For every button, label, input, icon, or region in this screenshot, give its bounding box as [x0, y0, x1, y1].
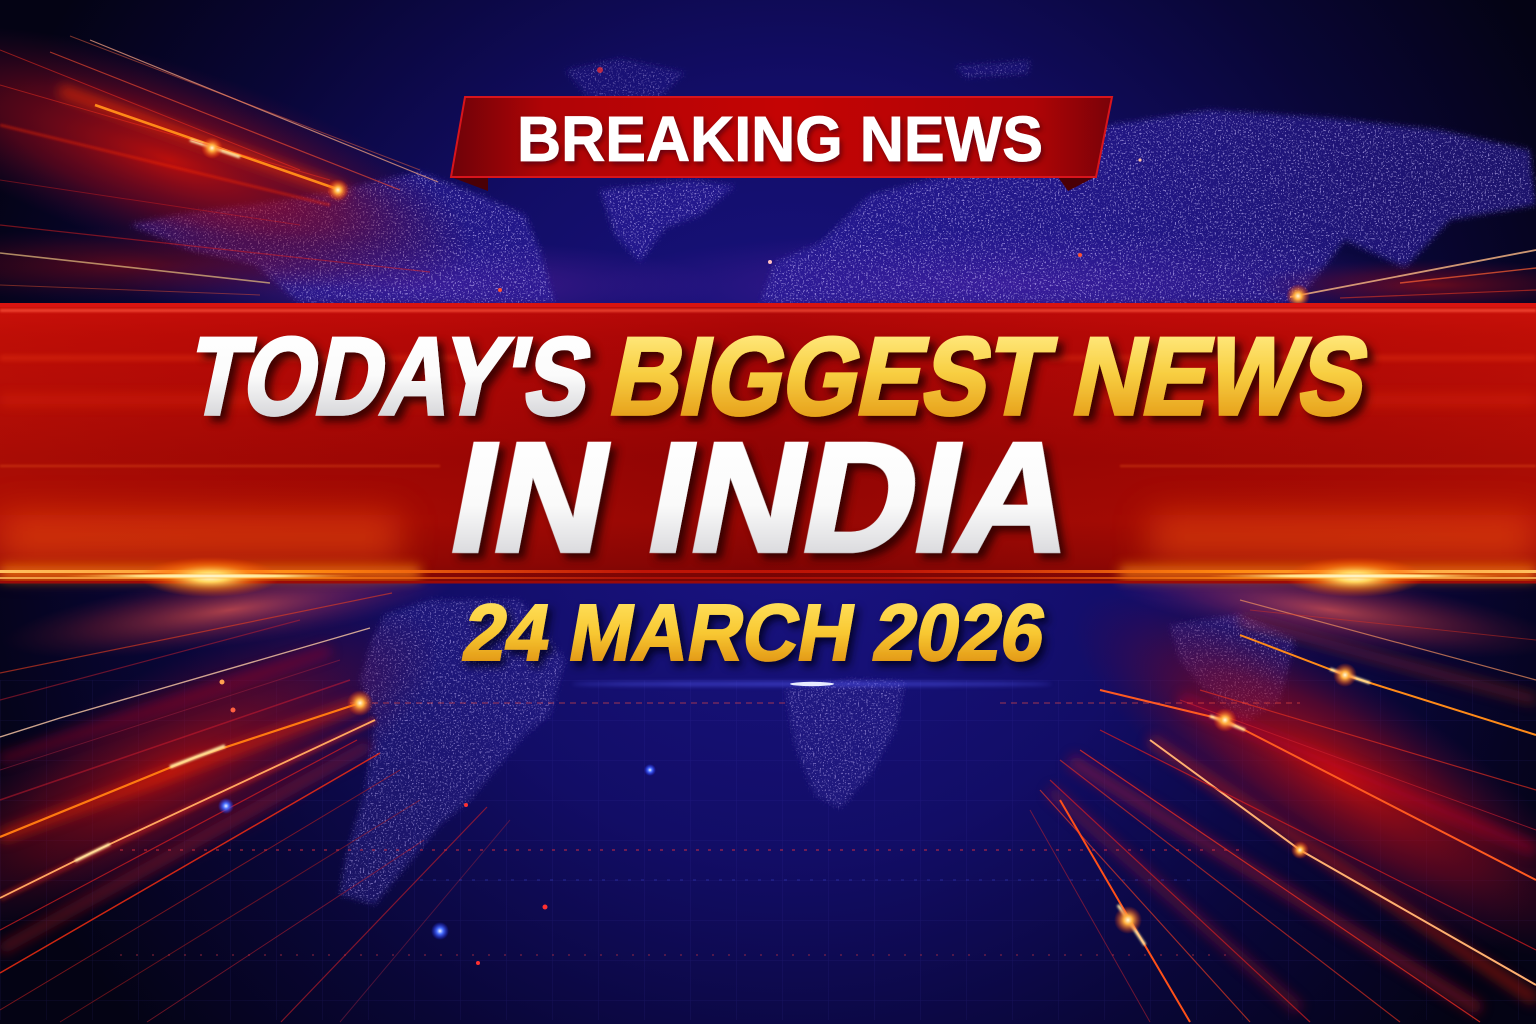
light rays: bottom right [1030, 600, 1536, 1022]
ribbon fold right [1058, 177, 1095, 191]
red headline band [0, 303, 1536, 583]
light rays: top right [1290, 250, 1536, 298]
purple haze behind upper map [120, 230, 1430, 340]
ribbon body [451, 97, 1112, 177]
light rays: top left [0, 36, 438, 295]
breaking news ribbon [451, 97, 1112, 191]
headline [179, 314, 1380, 585]
world map: lower continents [340, 600, 1295, 905]
sparks [201, 67, 1357, 965]
ribbon fold left [451, 177, 488, 191]
headline: today's: TODAY'S [179, 314, 603, 438]
headline: biggest news: BIGGEST NEWS [601, 314, 1380, 438]
data lines: horizontal dotted traces [120, 703, 1300, 955]
light rays: bottom left [0, 593, 510, 1022]
blue flare under date [572, 682, 1052, 686]
band bottom light beam with flares [0, 557, 1536, 597]
soft streaks in the lower corners [0, 620, 1536, 1010]
date: 24 MARCH 2026 [457, 589, 1053, 678]
world map: upper continents [130, 58, 1536, 303]
glow: orange haze below band [0, 542, 1536, 678]
ribbon label: BREAKING NEWS [517, 103, 1043, 175]
headline: in india: IN INDIA [437, 410, 1089, 585]
